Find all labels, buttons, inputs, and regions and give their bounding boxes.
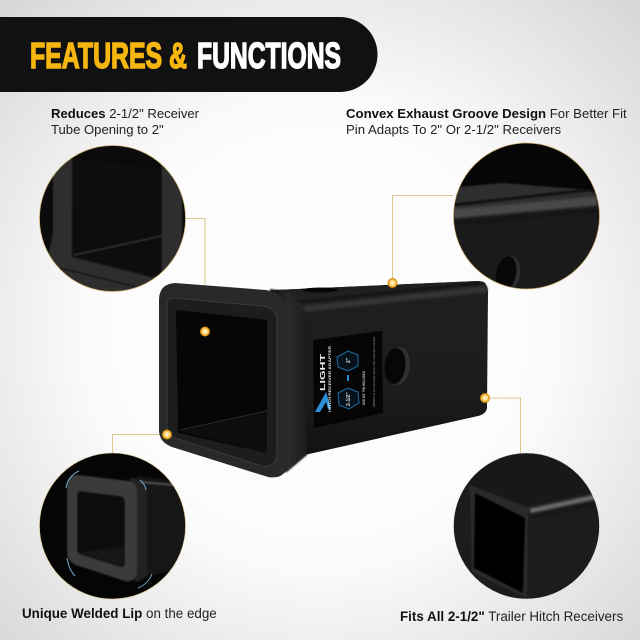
caption: convex groove: Pin Adapts To 2" Or 2-1/2" Receivers [346, 122, 561, 137]
caption: fits all: Fits All 2-1/2" Trailer Hitch Receivers [400, 609, 623, 624]
caption: welded lip: Unique Welded Lip on the edge [22, 606, 217, 621]
detail circle: receivers [453, 453, 600, 600]
hexagon badges [337, 351, 359, 409]
product label: 2-1/2" [346, 392, 352, 406]
tube body [275, 281, 488, 456]
title text: features: FEATURES & [30, 35, 187, 76]
side hole [384, 346, 412, 386]
detail circle: groove [453, 142, 600, 294]
collar [270, 289, 307, 476]
detail circle: tube opening [39, 145, 186, 295]
caption: convex groove: Convex Exhaust Groove Design For Better Fit [346, 106, 627, 121]
brand mark [315, 392, 331, 412]
top hole [302, 288, 338, 292]
product label [313, 331, 383, 428]
circle outline 4 [454, 453, 600, 599]
circle outline 1 [40, 146, 186, 292]
circle outline 2 [454, 143, 600, 289]
spec text: USE 5/8" PIN INCLUDED [362, 371, 366, 405]
caption: reduces: Reduces 2-1/2" Receiver [51, 106, 199, 121]
fine print: WARNING: do not exceed rated capacity of the lowest rated component [373, 337, 376, 407]
badge text: 2" [346, 357, 352, 363]
opening [176, 310, 267, 453]
title text: functions: FUNCTIONS [197, 35, 341, 76]
front lip [159, 283, 287, 477]
brand text: LIGHT [318, 353, 327, 391]
blue accent arcs [66, 471, 152, 588]
circle outline 3 [40, 453, 186, 599]
connector lines [112, 196, 520, 453]
title banner [0, 17, 378, 92]
product: hitch adapter [159, 281, 488, 477]
detail circle: welded lip [39, 453, 186, 600]
callout dots [162, 278, 490, 440]
subtitle text: HITCH RECEIVER ADAPTER [327, 346, 332, 412]
equals mark [347, 375, 349, 381]
caption: reduces: Tube Opening to 2" [51, 122, 164, 137]
hole [510, 256, 520, 288]
